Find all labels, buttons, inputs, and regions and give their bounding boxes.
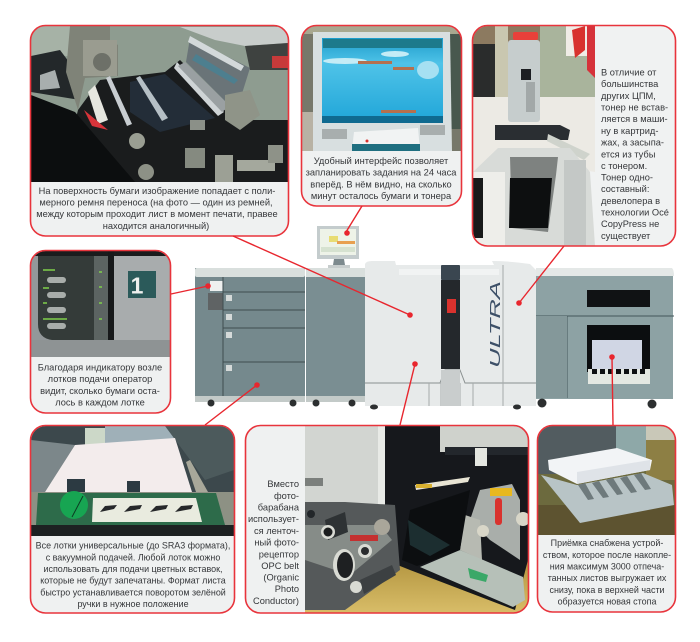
caption: interface [306, 156, 457, 201]
photo: toner tube [473, 26, 675, 246]
caption: transfer belt [36, 186, 278, 231]
photo: touchscreen monitor [302, 26, 461, 206]
caption: universal trays: ручки в нужное положение [77, 599, 189, 609]
callout line: OPC belt [400, 361, 418, 425]
callout line: tray indicator [171, 283, 211, 294]
panel: OPC belt [246, 426, 530, 613]
caption: universal trays: с вакуумной подачей. Любой лоток можно [46, 552, 220, 562]
photo: transfer belt [31, 26, 288, 236]
central print engine [365, 261, 536, 410]
caption: stacker: образуется новая стопа [558, 596, 656, 606]
photo: output tray [538, 426, 675, 612]
caption: interface: запланировать задания на 24 часа [306, 168, 457, 178]
photo: paper tray [31, 426, 234, 613]
caption: toner: тонер не встав- [601, 102, 668, 112]
caption: toner: составный: [601, 184, 649, 194]
caption: OPC belt: рецептор [259, 550, 299, 560]
caption: toner: Тонер одно- [601, 172, 653, 182]
stacker module [536, 268, 674, 408]
callout line: stacker [609, 354, 615, 425]
caption: interface: Удобный интерфейс позволяет [314, 156, 449, 166]
caption: universal trays: использовать для подачи цветных вставок, [44, 564, 222, 574]
caption: OPC belt: ся ленточ- [254, 526, 299, 536]
caption: transfer belt: находится аналогичный) [103, 221, 209, 231]
callout line: transfer belt [233, 236, 413, 318]
caption: toner: большинства [601, 79, 659, 89]
caption: OPC belt: фото- [274, 491, 299, 501]
caption: stacker [543, 538, 671, 606]
caption: toner: ну в картрид- [601, 126, 658, 136]
caption: stacker: Приёмка снабжена устрой- [551, 538, 663, 548]
second paper module [306, 268, 365, 406]
caption: stacker: ством, которое после накопле- [543, 550, 671, 560]
caption: interface: вперёд. В нём видно, на сколько [310, 180, 452, 190]
caption: tray indicator: видит, сколько бумаги оста- [40, 386, 160, 396]
caption: toner: других ЦПМ, [601, 91, 656, 101]
caption: OPC belt: Conductor) [253, 596, 299, 606]
caption: stacker: снизу, пока в верхней части [549, 585, 665, 595]
caption: toner: CopyPress не [601, 219, 659, 229]
caption: tray indicator: Благодаря индикатору возле [38, 362, 162, 372]
photo: indicator panel: 1 [131, 272, 144, 298]
caption: stacker: ния максимум 3000 отпеча- [550, 562, 664, 572]
left paper module [195, 268, 305, 406]
panel: stacker [538, 426, 676, 612]
caption: OPC belt: Вместо [267, 479, 299, 489]
callout line: interface [344, 206, 362, 236]
caption: toner: ется из тубы [601, 150, 656, 160]
caption: OPC belt: (Organic [263, 572, 299, 582]
caption: universal trays: быстро устанавливается поворотом зелёной [40, 588, 226, 598]
caption: toner: жах, а засыпа- [601, 138, 664, 148]
caption: transfer belt: На поверхность бумаги изображение попадает с поли- [39, 186, 275, 196]
caption: toner: девелопера в [601, 196, 660, 206]
caption: toner: В отличие от [601, 68, 657, 78]
caption: universal trays: Все лотки универсальные (до SRA3 формата), [36, 540, 230, 550]
panel: transfer belt [30, 26, 288, 236]
caption: tray indicator: лось в каждом лотке [55, 398, 145, 408]
caption: toner: технологии Océ [601, 208, 669, 218]
caption: toner: ляется в маши- [601, 114, 668, 124]
panel: universal trays [30, 426, 234, 613]
caption: stacker: танных листов выгружает их [548, 573, 667, 583]
caption: toner [601, 68, 669, 241]
caption: OPC belt: OPC belt [261, 561, 299, 571]
caption: toner: с тонером. [601, 161, 647, 171]
caption: tray indicator: лотков подачи оператор [48, 374, 152, 384]
callout line: toner [516, 246, 564, 306]
caption: universal trays [36, 540, 230, 609]
central print engine: ULTRA [487, 281, 504, 368]
operator monitor [317, 226, 359, 268]
caption: transfer belt: мерного ремня переноса (на фото — один из ремней, [39, 198, 273, 208]
caption: tray indicator [38, 362, 162, 408]
caption: OPC belt: использует- [248, 514, 299, 524]
machine: printer illustration [195, 226, 674, 410]
caption: transfer belt: между которым проходит лист в момент печати, правее [36, 209, 278, 219]
photo: opened engine [246, 426, 530, 613]
panel: toner [472, 26, 676, 246]
caption: toner: существует [601, 231, 651, 241]
caption: interface: минут осталось бумаги и тонера [311, 191, 452, 201]
caption: OPC belt: барабана [258, 502, 300, 512]
panel: tray indicator [30, 250, 170, 413]
caption: OPC belt: Photo [275, 584, 299, 594]
callout line: universal trays [205, 382, 260, 425]
photo: indicator panel [31, 251, 170, 413]
caption: universal trays: которые не будут запечатаны. Формат листа [40, 576, 226, 586]
caption: OPC belt: ный фото- [254, 538, 299, 548]
caption: OPC belt [248, 479, 300, 606]
panel: interface [302, 26, 462, 206]
